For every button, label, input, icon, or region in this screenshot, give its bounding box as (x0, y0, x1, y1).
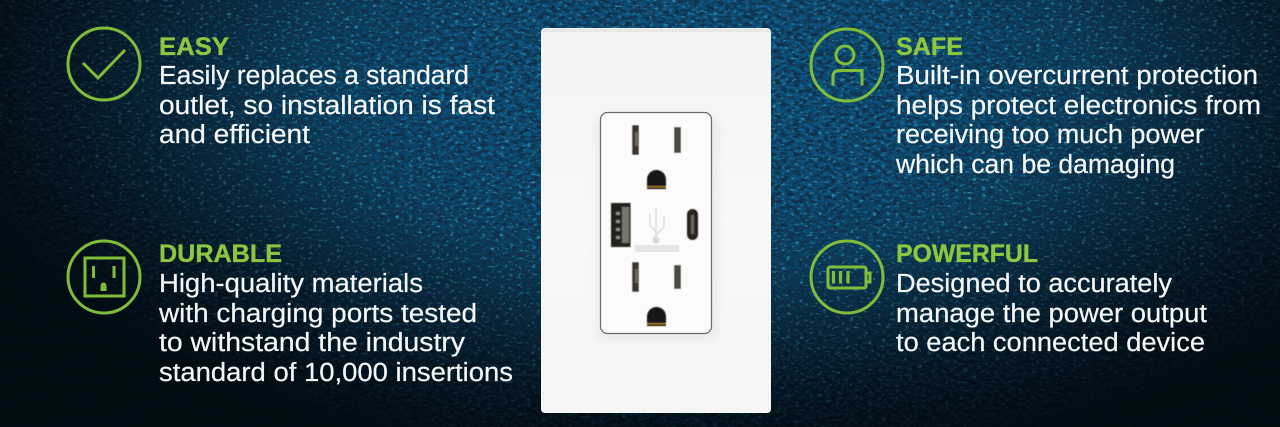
text block: powerful description: to each connected device (896, 329, 1205, 357)
text block: safe description: helps protect electronics from (896, 92, 1261, 120)
text block: safe description: which can be damaging (895, 151, 1175, 179)
heading: durable: DURABLE (159, 240, 282, 268)
icon: outlet in circle (68, 241, 140, 313)
USB-A port (611, 203, 630, 247)
text block: durable description: to withstand the industry (159, 329, 465, 357)
panel: easy (68, 28, 495, 149)
icon: check mark in circle (68, 28, 140, 100)
icon: person in circle (811, 29, 883, 101)
text block: safe description: Built-in overcurrent protection (896, 62, 1258, 90)
text block: powerful description (896, 270, 1207, 357)
wall plate (541, 28, 771, 413)
text block: easy description: and efficient (159, 121, 310, 149)
text block: easy description (159, 62, 495, 149)
panel: powerful (811, 240, 1207, 357)
text block: durable description: with charging ports tested (158, 300, 477, 328)
text block: easy description: outlet, so installation is fast (159, 92, 495, 120)
icon: battery in circle (811, 241, 883, 313)
receptacle face (600, 112, 712, 334)
heading: safe: SAFE (896, 33, 963, 61)
heading: easy: EASY (159, 33, 229, 61)
panel: durable (68, 240, 513, 387)
text block: durable description (158, 270, 513, 387)
panel: safe (811, 29, 1261, 179)
text block: safe description: receiving too much power (896, 121, 1205, 149)
USB-C port (687, 209, 698, 240)
heading: powerful: POWERFUL (896, 240, 1038, 268)
USB label (635, 245, 679, 252)
outlet wall plate (541, 28, 771, 413)
text block: powerful description: manage the power output (896, 300, 1207, 328)
bottom socket (630, 260, 683, 326)
USB symbol (650, 208, 664, 243)
top socket (630, 123, 683, 189)
text block: durable description: standard of 10,000 insertions (159, 359, 513, 387)
text block: powerful description: Designed to accurately (896, 270, 1172, 298)
text block: easy description: Easily replaces a standard (159, 62, 469, 90)
text block: durable description: High-quality materials (159, 270, 423, 298)
text block: safe description (895, 62, 1261, 179)
